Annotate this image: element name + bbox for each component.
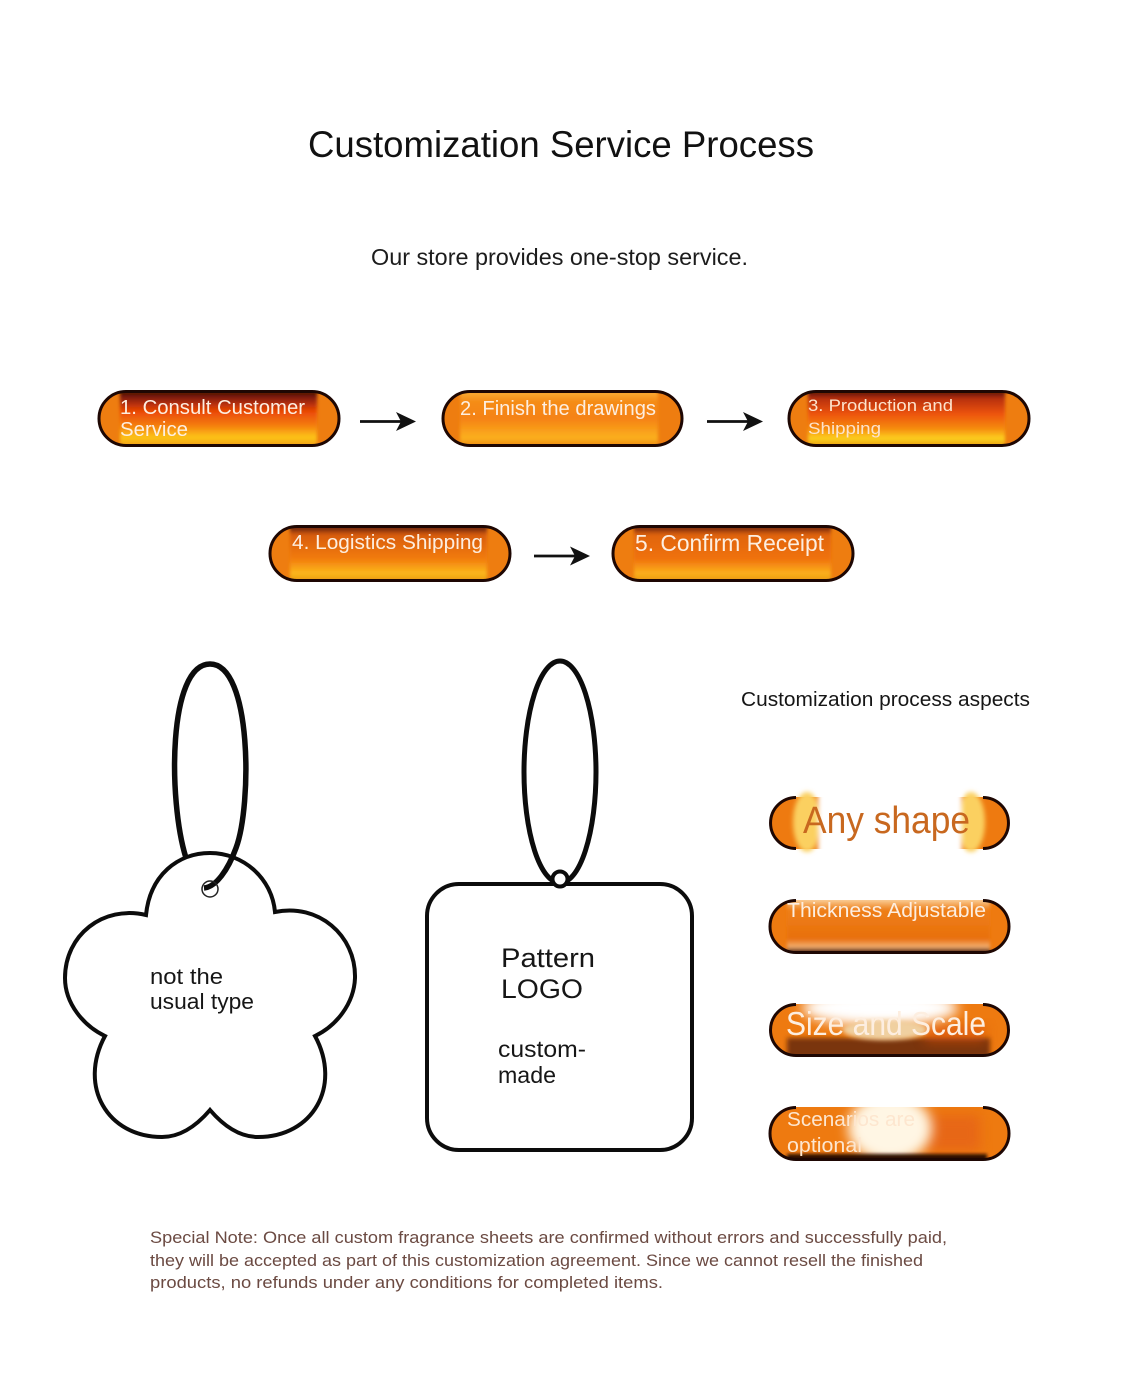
flower tag text: usual type: [150, 989, 254, 1014]
square tag loop: [524, 661, 596, 883]
flower tag: [65, 664, 355, 1137]
square tag hole: [552, 872, 568, 886]
step 2 pill: [442, 391, 683, 446]
aspects heading: Customization process aspects: [741, 689, 1030, 711]
aspect pill: scenarios: optional: [787, 1135, 862, 1157]
step 4 pill: 4. Logistics Shipping: [292, 532, 483, 554]
title: Customization Service Process: [308, 124, 814, 165]
step 1 pill: Service: [120, 419, 188, 441]
square tag text: [498, 943, 595, 1088]
aspect pill: scenarios: [768, 1106, 1010, 1161]
special note: products, no refunds under any conditions for completed items.: [150, 1273, 663, 1292]
step 3 pill: 3. Production and: [808, 396, 953, 415]
step 3 pill: [788, 391, 1030, 446]
arrow 1 to 2: [360, 412, 416, 431]
aspect pill: any shape: Any shape: [803, 800, 970, 842]
aspect pill: scenarios: Scenarios are: [787, 1109, 915, 1131]
square tag text: custom-: [498, 1036, 586, 1062]
special note: they will be accepted as part of this customization agreement. Since we cannot resell the finished: [150, 1251, 923, 1270]
flower tag text: not the: [150, 964, 223, 989]
aspect pill: thickness: Thickness Adjustable: [787, 900, 986, 922]
aspect pill: thickness: [770, 897, 1009, 955]
subtitle: Our store provides one-stop service.: [371, 244, 748, 270]
aspect pill: size and scale: [769, 1003, 1010, 1057]
step 2 pill: 2. Finish the drawings: [460, 398, 656, 420]
special note: Special Note: Once all custom fragrance sheets are confirmed without errors and successfully paid,: [150, 1228, 947, 1247]
flower hole: [202, 881, 218, 897]
step 1 pill: 1. Consult Customer: [120, 397, 305, 419]
flower tag loop: [175, 664, 246, 888]
square tag: [427, 661, 692, 1150]
step 5 pill: 5. Confirm Receipt: [635, 530, 825, 556]
step 5 pill: [612, 526, 854, 581]
square tag text: made: [498, 1062, 556, 1088]
flower outline: [65, 853, 355, 1137]
step 4 pill: [269, 526, 511, 581]
arrow 2 to 3: [707, 412, 763, 431]
step 1 pill: [98, 391, 340, 446]
square tag body: [427, 884, 692, 1150]
flower tag text: [150, 964, 254, 1014]
aspect pill: any shape: [770, 786, 1009, 860]
arrow 4 to 5: [534, 546, 590, 566]
square tag text: Pattern: [501, 943, 595, 973]
step 3 pill: Shipping: [808, 419, 881, 438]
aspect pill: size and scale: Size and Scale: [786, 1005, 986, 1042]
special note: [150, 1228, 947, 1292]
square tag text: LOGO: [501, 974, 583, 1004]
